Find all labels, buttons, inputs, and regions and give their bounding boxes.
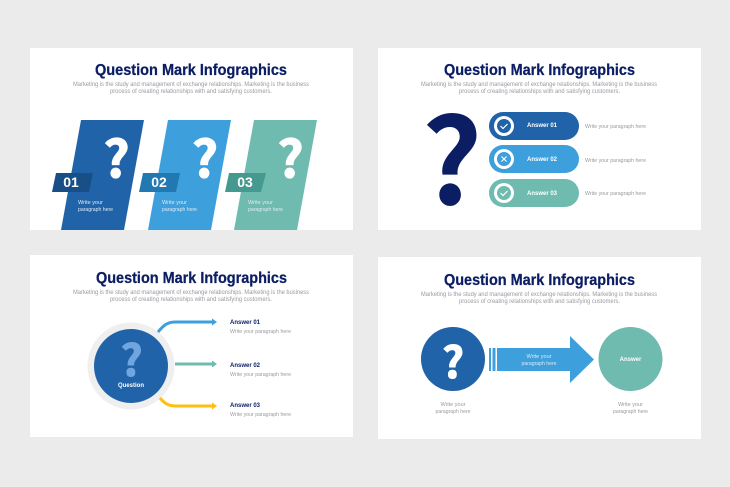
description: Marketing is the study and management of exchange relationships. Marketing is the business: [73, 82, 309, 88]
card 03: [225, 118, 317, 230]
answer 01 text: Answer 01: [230, 320, 261, 326]
answer 03 text: Answer 03: [230, 403, 261, 409]
heading: Question Mark Infographics: [444, 62, 635, 79]
large question mark: ?: [422, 68, 482, 238]
answer 02 text: Write your paragraph here: [230, 372, 291, 378]
paragraph 03: Write your paragraph here: [585, 191, 646, 197]
card 01: [52, 118, 144, 230]
card 01: 01: [63, 174, 79, 190]
answer 02 text: [230, 363, 291, 378]
card 02: [139, 118, 231, 230]
question circle: [421, 327, 485, 391]
description: [421, 292, 657, 305]
arrow: to answer 01: [158, 318, 217, 332]
description: [73, 290, 309, 303]
card 03: ?: [277, 118, 304, 192]
pill: answer 02: [489, 145, 579, 173]
description: process of creating relationships with and satisfying customers.: [110, 89, 272, 95]
card 02: paragraph here: [162, 207, 197, 213]
card 01: Write your: [78, 200, 103, 206]
pill: answer 01: [489, 112, 579, 140]
answer 03 text: Write your paragraph here: [230, 412, 291, 418]
card 01: paragraph here: [78, 207, 113, 213]
paragraph 01: Write your paragraph here: [585, 124, 646, 130]
arrow: to answer 03: [160, 398, 217, 410]
answer 02 text: Answer 02: [230, 363, 261, 369]
description: Marketing is the study and management of exchange relationships. Marketing is the business: [73, 290, 309, 296]
card 03: paragraph here: [248, 207, 283, 213]
card 02: ?: [192, 118, 218, 192]
answer 03 text: [230, 403, 291, 418]
pill: answer 01: Answer 01: [527, 123, 558, 129]
panel: question to three answers: [30, 255, 353, 437]
heading: Question Mark Infographics: [96, 270, 287, 287]
heading: Question Mark Infographics: [444, 272, 635, 289]
caption left: Write your: [440, 402, 466, 408]
pill: answer 03: [489, 179, 579, 207]
description: [73, 82, 309, 95]
description: process of creating relationships with and satisfying customers.: [459, 89, 620, 95]
pill: answer 03: Answer 03: [527, 191, 558, 197]
card 02: 02: [151, 174, 167, 190]
heading: Question Mark Infographics: [95, 62, 287, 79]
caption left: [436, 402, 470, 415]
description: [421, 82, 657, 95]
panel: question arrow answer: [378, 257, 701, 439]
description: Marketing is the study and management of exchange relationships. Marketing is the business: [421, 82, 657, 88]
paragraph 02: Write your paragraph here: [585, 158, 646, 164]
answer circle: [598, 327, 662, 391]
caption right: [613, 402, 648, 415]
card 02: Write your: [162, 200, 187, 206]
arrow: to answer 02: [175, 360, 217, 368]
card 01: ?: [103, 118, 130, 192]
arrow: paragraph here: [522, 361, 556, 367]
card 03: 03: [237, 174, 253, 190]
caption right: paragraph here: [613, 409, 648, 415]
caption right: Write your: [618, 402, 643, 408]
panel: slanted cards: [30, 48, 353, 230]
answer 01 text: Write your paragraph here: [230, 329, 291, 335]
description: process of creating relationships with and satisfying customers.: [110, 297, 272, 303]
answer 01 text: [230, 320, 291, 335]
answer circle: Answer: [620, 357, 642, 363]
description: process of creating relationships with and satisfying customers.: [459, 299, 620, 305]
question circle: Question: [118, 383, 144, 389]
description: Marketing is the study and management of exchange relationships. Marketing is the business: [421, 292, 657, 298]
question circle: [88, 322, 174, 410]
arrow: Write your: [526, 354, 552, 360]
arrow: [489, 336, 594, 383]
pill: answer 02: Answer 02: [527, 157, 558, 163]
question circle: ?: [120, 327, 143, 389]
caption left: paragraph here: [436, 409, 470, 415]
question circle: ?: [442, 329, 464, 391]
panel: answer pills: [378, 48, 701, 238]
card 03: Write your: [248, 200, 273, 206]
